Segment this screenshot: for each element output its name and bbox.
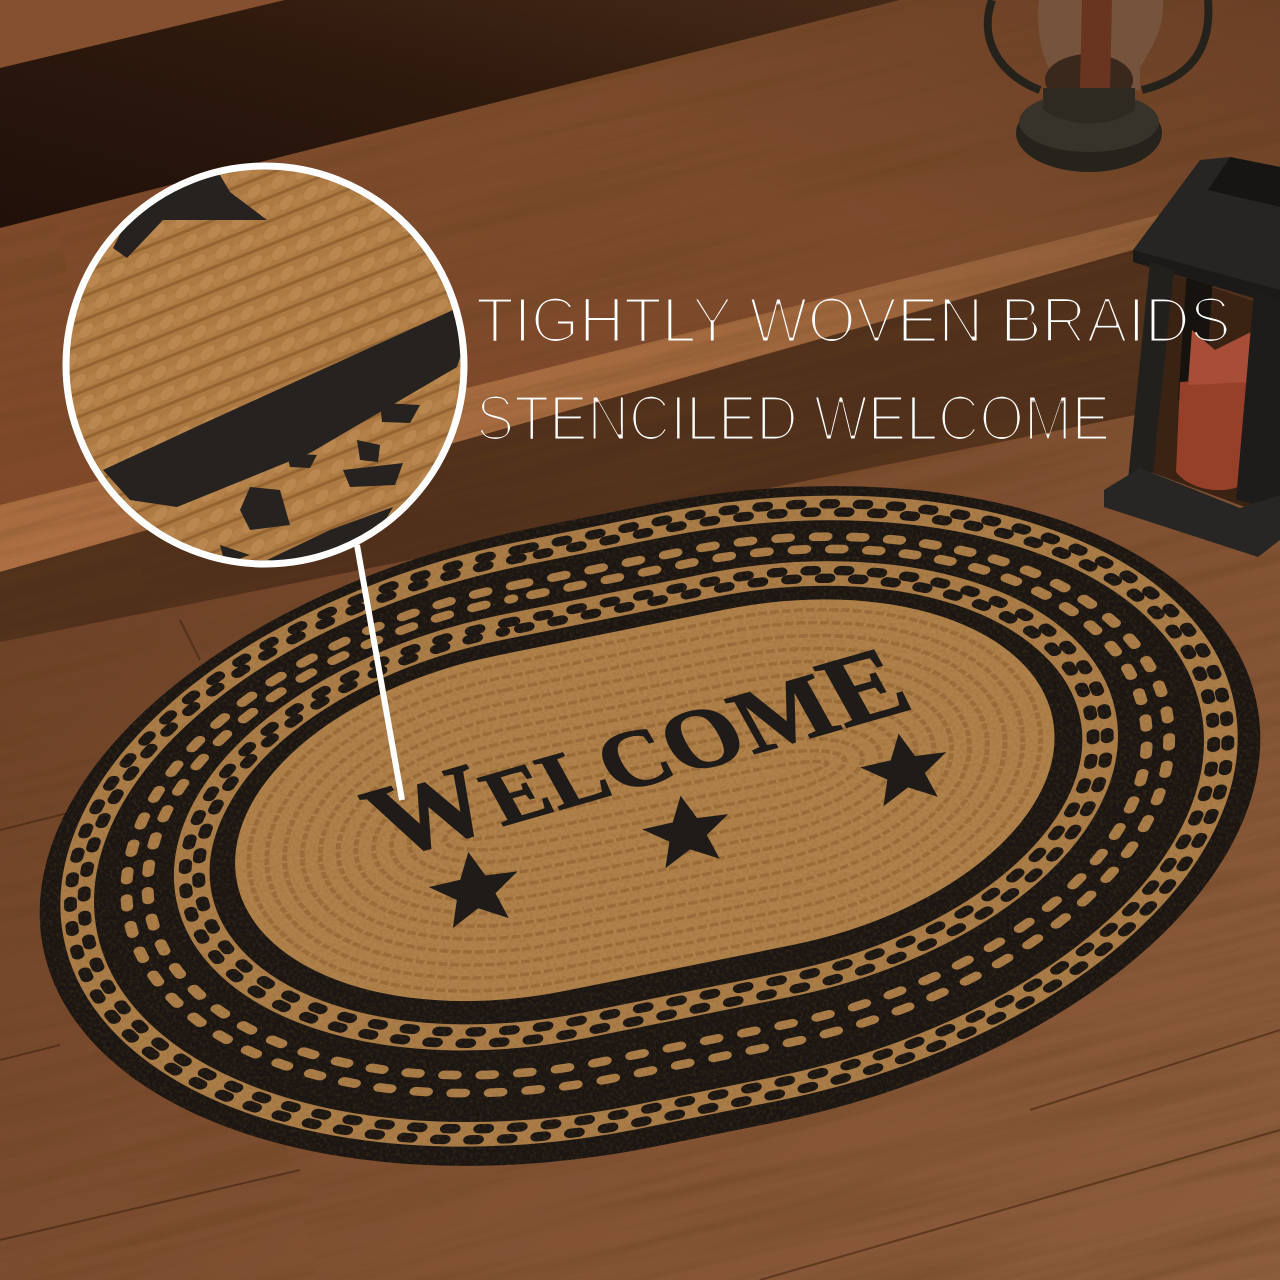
black lantern	[1104, 157, 1280, 557]
lantern roof cap	[1208, 157, 1280, 207]
rug welcome lettering: WELCOME	[345, 624, 929, 879]
lamp burner cup	[1045, 54, 1133, 106]
magnified letter fragment	[113, 170, 267, 258]
caption: stenciled welcome: STENCILED WELCOME	[476, 382, 1110, 454]
lantern eave band	[1133, 250, 1280, 306]
lantern roof	[1133, 157, 1280, 296]
magnified detail circle	[66, 166, 464, 564]
middle stair tread	[0, 0, 1280, 505]
lantern candle lower	[1176, 378, 1252, 490]
magnifier ring	[66, 166, 464, 564]
caption: tightly woven braids: TIGHTLY WOVEN BRAIDS	[476, 284, 1231, 356]
oil lamp	[988, 0, 1208, 172]
lamp candle	[1080, 0, 1112, 88]
rug star right	[856, 726, 954, 809]
lamp wire handle	[988, 0, 1208, 90]
lantern interior	[1145, 270, 1280, 520]
lamp glass	[1038, 0, 1163, 90]
floor plank seams	[0, 620, 1280, 1280]
rug outer braid	[24, 425, 1274, 1218]
lamp base	[1016, 94, 1162, 172]
rug star middle	[638, 788, 736, 871]
magnified black spots	[220, 403, 420, 564]
top stair tread	[0, 0, 285, 68]
rug center coils	[219, 563, 1071, 1038]
lower stair riser	[0, 215, 1280, 642]
lantern right post	[1236, 292, 1280, 510]
stair nosing	[0, 185, 1280, 572]
rug outer black edge	[0, 395, 1280, 1257]
lantern back post	[1178, 270, 1213, 400]
rug center field	[203, 550, 1086, 1050]
lantern left post	[1128, 262, 1174, 480]
rug braid bands	[0, 395, 1280, 1257]
rug spotted band	[80, 464, 1216, 1166]
rug fiber texture	[30, 470, 1270, 1180]
braided rug	[40, 486, 1260, 1166]
magnified black band	[103, 310, 464, 507]
callout leader line	[357, 545, 402, 800]
lantern base	[1104, 468, 1280, 557]
rug inner braid	[154, 516, 1138, 1096]
rug star left	[424, 844, 525, 931]
magnified weave	[66, 166, 464, 564]
upper stair riser	[0, 0, 900, 228]
rug inner black ring	[176, 531, 1115, 1076]
lantern candle upper	[1188, 330, 1255, 385]
